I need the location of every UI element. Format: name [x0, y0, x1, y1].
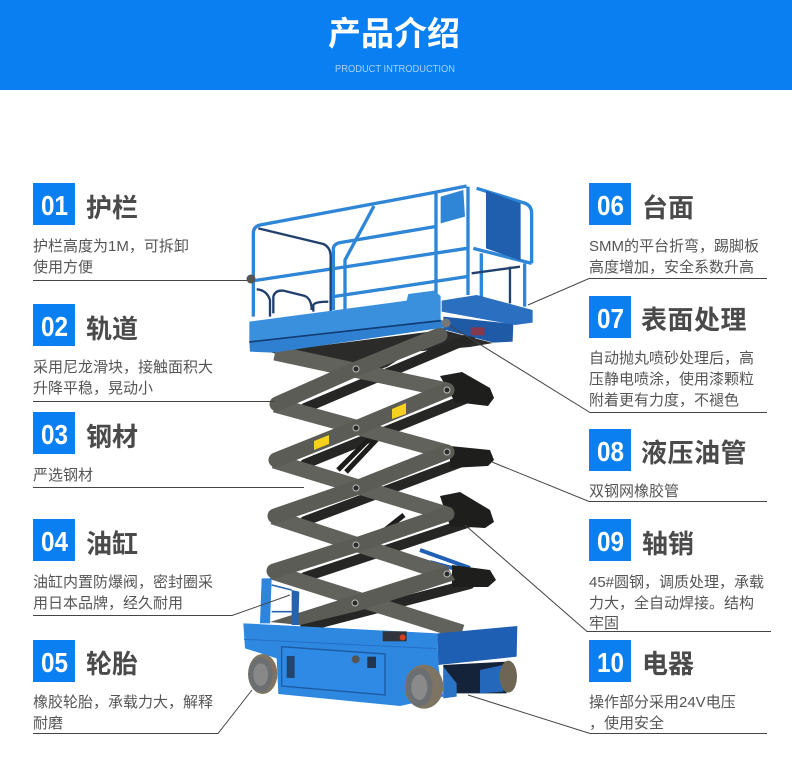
- callout 04 cylinder: [33, 519, 290, 616]
- warning labels: [314, 403, 406, 450]
- callout 06 deck: 台面: [642, 193, 694, 223]
- callout 07 surface: 表面处理: [641, 305, 747, 335]
- callout 02 track: 升降平稳，晃动小: [33, 380, 153, 397]
- platform: [249, 186, 533, 353]
- bottom scissor arm: [270, 566, 455, 625]
- callout 07 surface: 07: [597, 303, 624, 334]
- callout 01 guardrail: 使用方便: [33, 259, 93, 276]
- platform deck: [249, 291, 441, 343]
- rear scissor arms: [305, 338, 470, 627]
- right front wheel: [405, 665, 443, 709]
- control display: [383, 631, 407, 641]
- callout 06 deck: [528, 183, 767, 305]
- callout 08 hose: [492, 429, 767, 502]
- callout 09 pin: 牢固: [589, 615, 619, 632]
- callout 10 electrics: 操作部分采用24V电压: [589, 694, 736, 711]
- callout 04 cylinder: 油缸: [86, 529, 138, 559]
- callout 01 guardrail: 护栏: [86, 193, 138, 223]
- callout 09 pin: [465, 519, 771, 632]
- callout 08 hose: 08: [597, 436, 624, 467]
- hydraulic cylinder: [338, 436, 404, 530]
- subtitle: PRODUCT INTRODUCTION: [335, 64, 455, 75]
- callout 04 cylinder: 用日本品牌，经久耐用: [33, 595, 183, 612]
- callout 07 surface: 自动抛丸喷砂处理后，高: [589, 350, 754, 367]
- callout 10 electrics: 电器: [642, 649, 694, 679]
- callout 08 hose: 双钢网橡胶管: [589, 483, 679, 500]
- callout 06 deck: SMM的平台折弯，踢脚板: [589, 237, 759, 255]
- rising scissor arms: [274, 335, 447, 571]
- callout 06 deck: 06: [597, 190, 624, 221]
- callout 03 steel: 03: [41, 419, 68, 450]
- access panel: [282, 647, 385, 695]
- left front wheel: [248, 654, 277, 694]
- callout 10 electrics: 10: [597, 647, 624, 678]
- callout 01 guardrail: 01: [41, 190, 68, 221]
- side marker patch: [471, 327, 485, 335]
- falling scissor arms: [272, 353, 462, 632]
- platform underside shadow: [270, 330, 493, 376]
- callout 05 tyre: [33, 640, 252, 734]
- callout 03 steel: 严选钢材: [33, 467, 93, 484]
- control box and rear panel: [441, 190, 465, 223]
- callout 03 steel: 钢材: [86, 422, 138, 452]
- callout 04 cylinder: 04: [41, 526, 68, 557]
- callout 10 electrics: [468, 640, 767, 734]
- callout 01 guardrail: 护栏高度为1M，可拆卸: [33, 238, 189, 255]
- callout 05 tyre: 耐磨: [33, 715, 63, 732]
- title: 产品介绍: [328, 15, 460, 52]
- callout 09 pin: 45#圆钢，调质处理，承载: [589, 574, 764, 591]
- rear wheel: [500, 661, 517, 693]
- callout 07 surface: 压静电喷涂，使用漆颗粒: [589, 371, 754, 388]
- scissor pins: [352, 366, 450, 606]
- callout 02 track: 02: [41, 311, 68, 342]
- hydraulic hoses: [420, 550, 482, 576]
- side skirt: [243, 623, 443, 706]
- callout 05 tyre: 05: [41, 647, 68, 678]
- callout 01 guardrail: [33, 183, 256, 284]
- chassis: [243, 578, 517, 709]
- callout 04 cylinder: 油缸内置防爆阀，密封圈采: [33, 573, 213, 591]
- callout 02 track: 轨道: [86, 314, 138, 344]
- header banner: [0, 0, 792, 90]
- rear upright post: [260, 578, 272, 623]
- callout 03 steel: [33, 412, 304, 488]
- platform underside: [443, 317, 513, 343]
- callout 02 track: 采用尼龙滑块，接触面积大: [33, 359, 213, 376]
- rear body: [437, 626, 517, 665]
- scissor lift illustration: [243, 186, 533, 709]
- arm end cylinders: [440, 372, 496, 587]
- callout 08 hose: 液压油管: [641, 438, 747, 468]
- callout 05 tyre: 橡胶轮胎，承载力大，解释: [33, 694, 213, 711]
- callout 07 surface: 附着更有力度，不褪色: [589, 392, 739, 409]
- callout 09 pin: 力大，全自动焊接。结构: [589, 594, 754, 612]
- callout 02 track: [33, 304, 275, 402]
- callout 09 pin: 轴销: [642, 529, 694, 559]
- callout 10 electrics: ，使用安全: [589, 714, 664, 732]
- callout 06 deck: 高度增加，安全系数升高: [589, 258, 754, 276]
- guard rails: [253, 186, 532, 317]
- callout 09 pin: 09: [597, 526, 624, 557]
- callout 05 tyre: 轮胎: [86, 649, 138, 679]
- callout 07 surface: [442, 296, 767, 412]
